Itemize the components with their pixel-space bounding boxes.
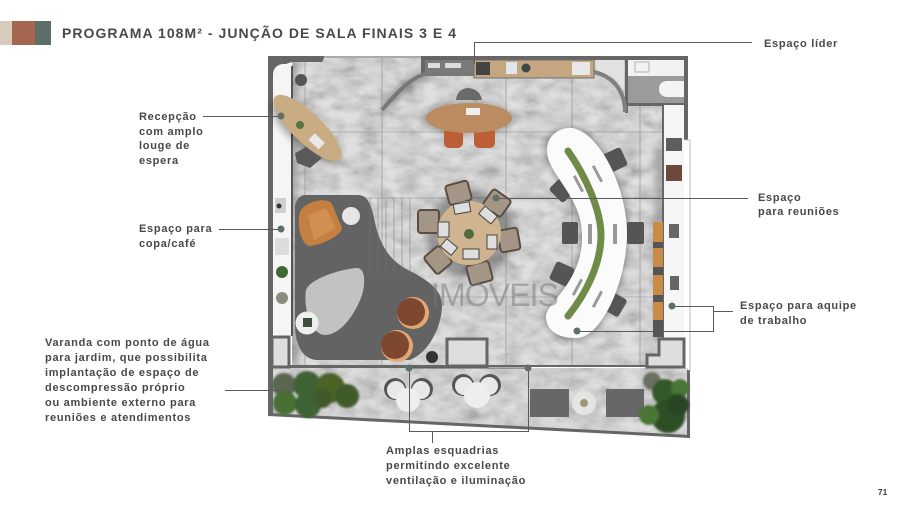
balcony seating — [384, 374, 501, 412]
label: Recepção: Recepção — [139, 111, 197, 123]
label: Espaço para copa/café: copa/café — [139, 238, 196, 250]
label: Amplas esquadrias: Amplas esquadrias — [386, 445, 499, 457]
page number: 71 — [878, 488, 888, 497]
reception desk — [264, 86, 350, 173]
side table — [342, 207, 360, 225]
marble floor — [292, 58, 662, 365]
wall-mounted circle — [295, 74, 307, 86]
label: Espaço para aquipe de trabalho — [740, 300, 857, 327]
label: Varanda: reuniões e atendimentos — [45, 412, 191, 424]
label: Recepção — [139, 111, 204, 167]
label: Recepção: com amplo — [139, 126, 204, 138]
label: Espaço para reuniões: Espaço — [758, 192, 801, 204]
floor plan — [264, 45, 690, 438]
label: Espaço para reuniões: para reuniões — [758, 206, 840, 218]
sofa stone — [305, 268, 364, 335]
label: Recepção: espera — [139, 155, 179, 167]
right storage strip — [653, 105, 690, 372]
bathroom — [628, 60, 684, 106]
balcony plants right — [639, 372, 689, 433]
curved workstation — [546, 128, 644, 338]
label: Varanda: ou ambiente externo para — [45, 397, 196, 409]
label: Espaço para copa/café: Espaço para — [139, 223, 213, 235]
coffee table — [296, 312, 318, 334]
top wall niche — [425, 60, 475, 74]
label: Espaço líder: Espaço líder — [764, 38, 838, 50]
label: Amplas esquadrias — [386, 445, 526, 487]
label: Espaço para aquipe de trabalho: de trabalho — [740, 315, 807, 327]
label: Varanda — [45, 337, 210, 424]
balcony loungers — [530, 389, 644, 417]
label: Espaço para copa/café — [139, 223, 213, 250]
label: Recepção: louge de — [139, 140, 190, 152]
left white strip — [273, 64, 291, 335]
label: Varanda: para jardim, que possibilita — [45, 352, 208, 364]
leader lines — [203, 42, 752, 443]
label: Espaço para reuniões — [758, 192, 840, 218]
curved glass partition — [382, 74, 474, 110]
wood bench — [474, 60, 594, 78]
shaft top right — [596, 60, 624, 90]
outer walls — [268, 56, 690, 438]
balcony floor — [270, 366, 690, 438]
label: Espaço para aquipe de trabalho: Espaço para aquipe — [740, 300, 857, 312]
marker dots — [278, 94, 676, 372]
carpet — [295, 195, 442, 360]
watermark: IMOVEIS — [431, 277, 559, 313]
balcony plants left — [272, 371, 359, 418]
colour swatches — [0, 21, 51, 45]
armchair — [299, 200, 342, 246]
meeting oval desk — [426, 88, 512, 148]
round poufs — [381, 297, 438, 363]
watermark stripes — [370, 198, 410, 275]
label: Varanda: implantação de espaço de — [45, 367, 199, 379]
label: Varanda: Varanda com ponto de água — [45, 337, 210, 349]
label: Varanda: descompressão próprio — [45, 382, 185, 394]
label: Amplas esquadrias: ventilação e iluminação — [386, 475, 526, 487]
round table with chairs — [418, 180, 521, 286]
title: PROGRAMA 108M² - JUNÇÃO DE SALA FINAIS 3 E 4 — [62, 24, 457, 41]
shafts — [272, 337, 684, 367]
label: Amplas esquadrias: permitindo excelente — [386, 460, 510, 472]
door arc — [594, 72, 625, 112]
